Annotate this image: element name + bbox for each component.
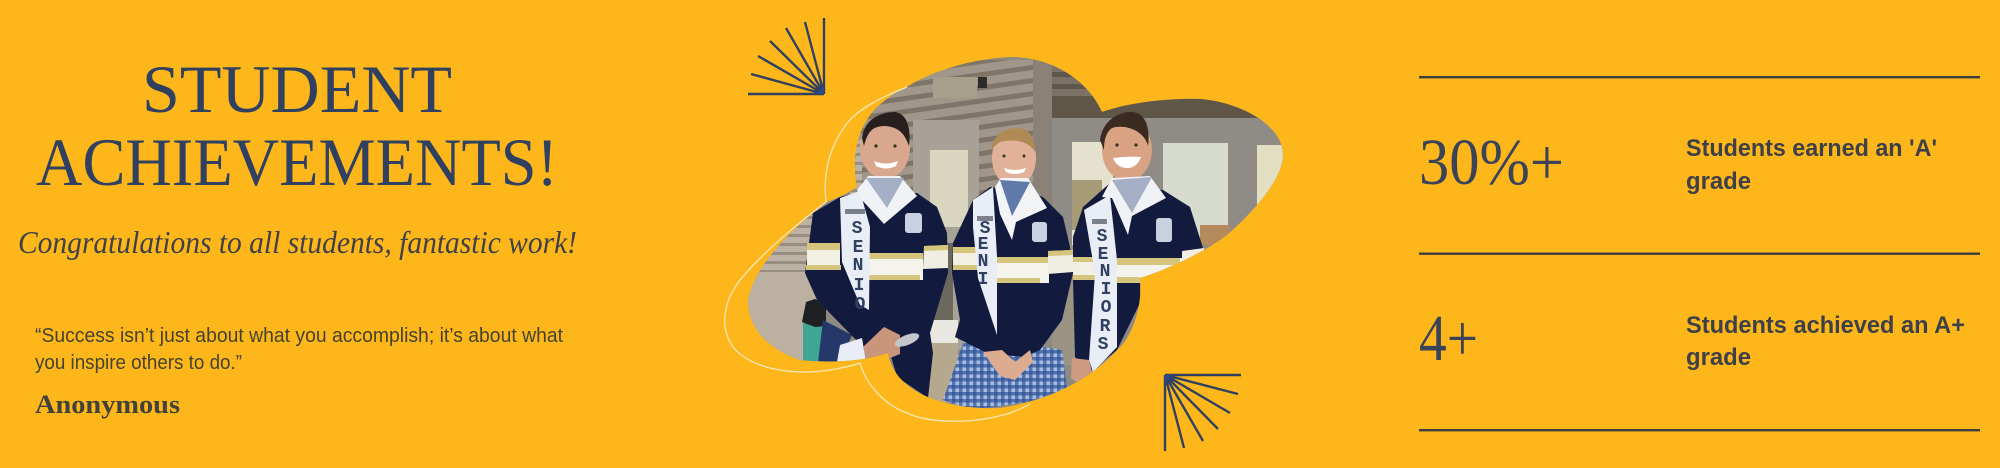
stat: 4+: grade [1686, 344, 1751, 371]
sash lettering: SENIO [852, 219, 866, 315]
sash lettering: SENIORS [1097, 227, 1112, 355]
quote: you inspire others to do.” [35, 352, 242, 374]
sash lettering: SENI [978, 219, 991, 290]
stats: horizontal rules [1419, 76, 1980, 431]
stat: 4+ [1419, 302, 1965, 375]
quote attribution: Anonymous [35, 390, 180, 419]
student 3 [1071, 112, 1204, 384]
icon: sunburst top left [748, 18, 824, 94]
quote [35, 325, 563, 374]
jacket under arm [818, 320, 852, 363]
stat: 4+: Students achieved an A+ [1686, 312, 1965, 339]
stat: 30%+: grade [1686, 168, 1751, 195]
subtitle: Congratulations to all students, fantastic work! [18, 224, 577, 260]
sash lettering [852, 219, 1112, 355]
student 1 [805, 112, 948, 398]
photo outline: thin cream line [725, 87, 1030, 421]
icon: sunburst bottom right [1165, 375, 1241, 451]
quote: “Success isn’t just about what you accomplish; it’s about what [35, 325, 563, 347]
title: STUDENT [142, 51, 452, 127]
title [36, 51, 558, 200]
bin [803, 323, 822, 361]
title: ACHIEVEMENTS! [36, 124, 558, 200]
stat: 30%+ [1419, 126, 1937, 199]
stat: 30%+: 30%+ [1419, 126, 1564, 199]
stat: 4+: 4+ [1419, 302, 1478, 375]
photo: three students in blob frame [740, 50, 1292, 420]
stat: 30%+: Students earned an 'A' [1686, 135, 1937, 162]
student 2 [943, 128, 1073, 410]
